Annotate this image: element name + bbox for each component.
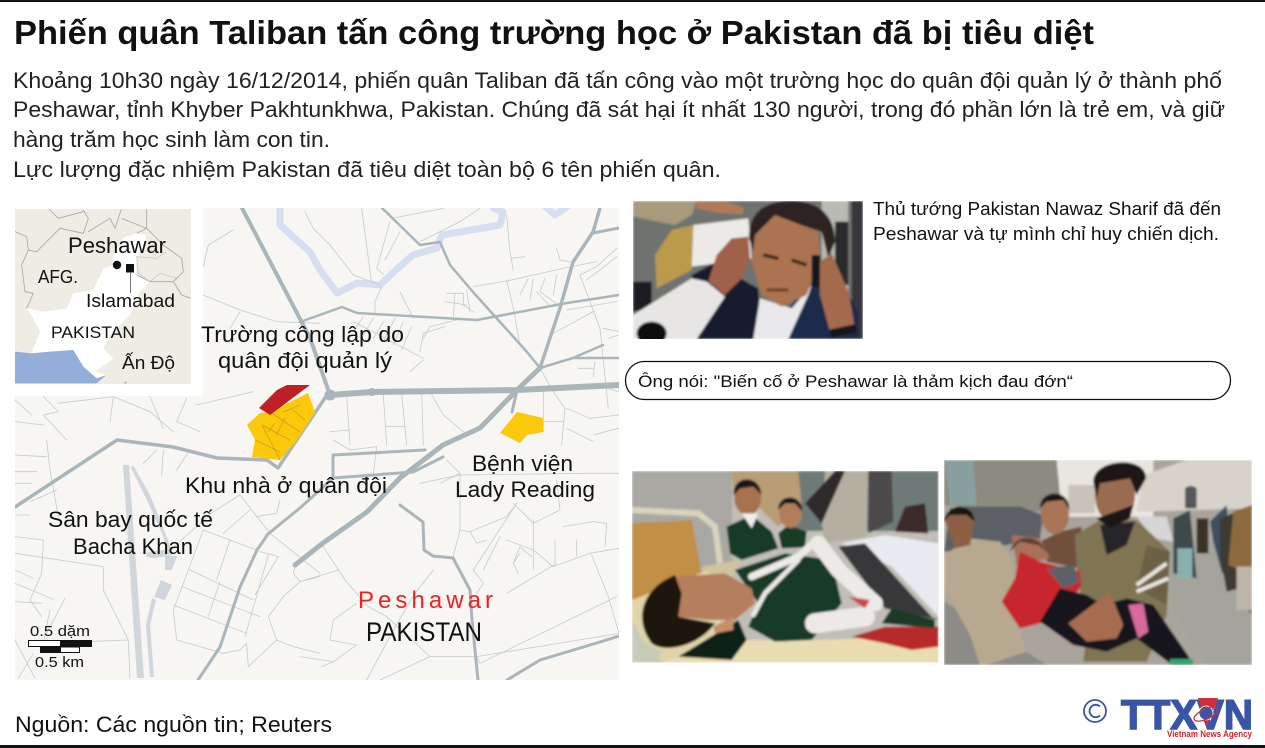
inset labels: PAKISTAN: [51, 323, 135, 342]
inset labels: Peshawar: [68, 233, 166, 258]
title: Phiến quân Taliban tấn công trường học ở Pakistan đã bị tiêu diệt: [14, 14, 1094, 51]
scale bar: [28, 624, 92, 671]
inset labels: Ấn Độ: [122, 352, 175, 373]
label: Pakistan: PAKISTAN: [366, 617, 482, 647]
panel: locator inset map: [15, 208, 191, 384]
callout: quote: Ông nói: "Biến cố ở Peshawar là thảm kịch đau đớn“: [638, 372, 1073, 391]
minor streets: [15, 208, 620, 680]
intro text block: Khoảng 10h30 ngày 16/12/2014, phiến quân Taliban đã tấn công vào một trường học do quân đội quản lý ở thành phố: [13, 68, 1222, 93]
label: school: quân đội quản lý: [218, 348, 392, 373]
label: airport: Bacha Khan: [73, 534, 193, 559]
label: military housing: Khu nhà ở quân đội: [185, 473, 387, 498]
inset labels: AFG.: [38, 267, 78, 287]
label: airport: Sân bay quốc tế: [48, 507, 213, 532]
inset labels: [38, 233, 175, 373]
icon: globe: [1192, 698, 1220, 727]
military housing area: [247, 393, 315, 460]
caption: Nawaz Sharif: [873, 199, 1221, 244]
intro text block: [13, 68, 1225, 182]
intro text block: Peshawar, tỉnh Khyber Pakhtunkhwa, Pakistan. Chúng đã sát hại ít nhất 130 người, trong đó phần lớn là trẻ em, và giữ: [13, 97, 1225, 122]
logo: TTXVN: Vietnam News Agency: [1167, 729, 1252, 739]
label: school: Trường công lập do: [201, 322, 404, 347]
airport runway: [123, 465, 177, 678]
logo: TTXVN: TTXVN: [1121, 691, 1253, 738]
major roads: [15, 208, 619, 680]
Pakistan territory: [27, 233, 150, 383]
Arabian Sea: [15, 350, 107, 383]
scale bar: 0.5 dặm: [30, 624, 90, 640]
photo: Nawaz Sharif on the phone: [633, 201, 863, 345]
label: hospital: [455, 451, 595, 502]
label: hospital: Lady Reading: [455, 477, 595, 502]
caption: Nawaz Sharif: Thủ tướng Pakistan Nawaz Sharif đã đến: [873, 199, 1221, 219]
caption: Nawaz Sharif: Peshawar và tự mình chỉ huy chiến dịch.: [873, 224, 1219, 244]
scale bar: 0.5 km: [35, 655, 84, 671]
source: Nguồn: Các nguồn tin; Reuters: [15, 712, 332, 737]
photo: man carrying injured child: [944, 460, 1252, 665]
label: hospital: Bệnh viện: [472, 451, 573, 476]
school: [259, 385, 310, 415]
Peshawar marker: [113, 261, 121, 269]
panel: Peshawar street map: [15, 206, 620, 680]
callout: quote: [626, 362, 1230, 400]
label: airport: [48, 507, 213, 559]
river: [280, 206, 568, 293]
hospital: [500, 412, 543, 443]
photo: injured student on hospital bed: [632, 471, 939, 663]
label: school: [201, 322, 404, 373]
label: Peshawar: Peshawar: [358, 587, 493, 614]
icon: copyright: [1084, 700, 1106, 722]
intro text block: Lực lượng đặc nhiệm Pakistan đã tiêu diệt toàn bộ 6 tên phiến quân.: [13, 157, 721, 182]
Islamabad marker: [126, 264, 134, 293]
intro text block: hàng trăm học sinh làm con tin.: [13, 127, 330, 152]
inset labels: Islamabad: [86, 291, 175, 311]
